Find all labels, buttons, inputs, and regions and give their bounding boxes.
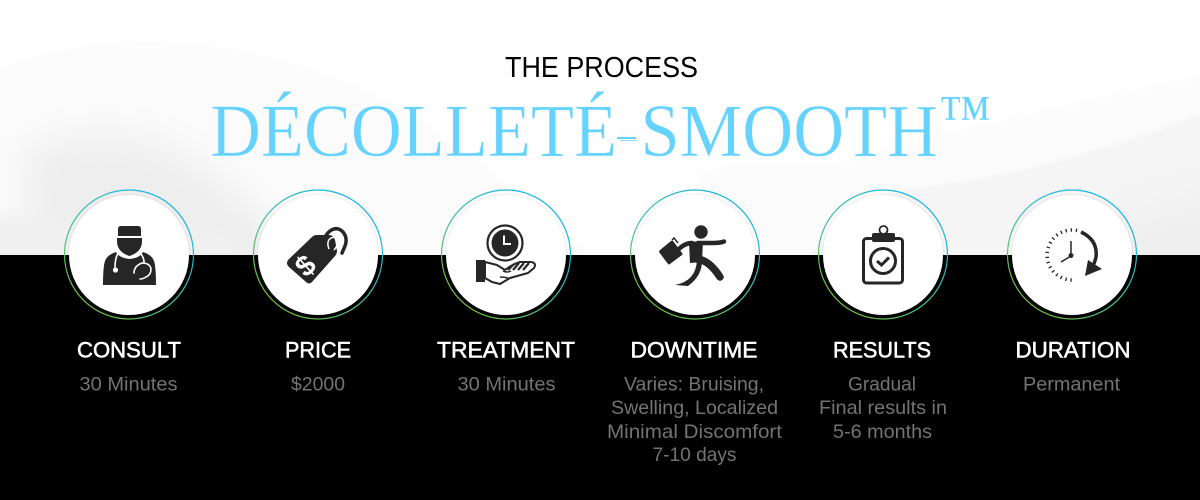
icon: running businessman bbox=[659, 225, 724, 286]
label: treatment: TREATMENT bbox=[437, 338, 575, 362]
title: Décolleté-Smooth: ™ bbox=[939, 83, 991, 148]
icon: price tag: $ bbox=[289, 249, 323, 284]
icon: clock on hand bbox=[476, 226, 535, 284]
value: downtime: Minimal Discomfort bbox=[607, 421, 783, 443]
label: price: PRICE bbox=[285, 338, 351, 362]
value: downtime: Varies: Bruising, bbox=[624, 374, 764, 396]
step: downtime bbox=[607, 190, 783, 466]
value: results: 5-6 months bbox=[833, 421, 932, 443]
value: consult: 30 Minutes bbox=[80, 374, 178, 396]
value: results: Final results in bbox=[819, 397, 947, 419]
value: treatment: 30 Minutes bbox=[458, 374, 556, 396]
value: downtime: Swelling, Localized bbox=[611, 397, 778, 419]
step: consult bbox=[64, 190, 194, 396]
icon: clipboard bbox=[864, 226, 902, 283]
label: downtime: DOWNTIME bbox=[630, 338, 758, 362]
icon: clock with arrow bbox=[1047, 230, 1102, 280]
value: downtime bbox=[607, 374, 783, 466]
value: results: Gradual bbox=[848, 374, 916, 396]
value: price: $2000 bbox=[291, 374, 345, 396]
step: duration bbox=[1008, 190, 1136, 396]
value: duration: Permanent bbox=[1023, 374, 1121, 396]
label: results: RESULTS bbox=[833, 338, 931, 362]
icon: price tag bbox=[287, 229, 346, 284]
step: treatment bbox=[437, 190, 575, 396]
value: results bbox=[819, 374, 947, 443]
heading: the process: THE PROCESS bbox=[505, 52, 698, 84]
title: Décolleté-Smooth: DÉCOLLETÉ-SMOOTH bbox=[210, 90, 938, 173]
label: consult: CONSULT bbox=[77, 338, 181, 362]
icon: doctor bbox=[103, 226, 156, 285]
value: downtime: 7-10 days bbox=[652, 444, 737, 466]
label: duration: DURATION bbox=[1016, 338, 1130, 362]
step: price bbox=[254, 190, 382, 396]
step: results bbox=[818, 190, 948, 443]
